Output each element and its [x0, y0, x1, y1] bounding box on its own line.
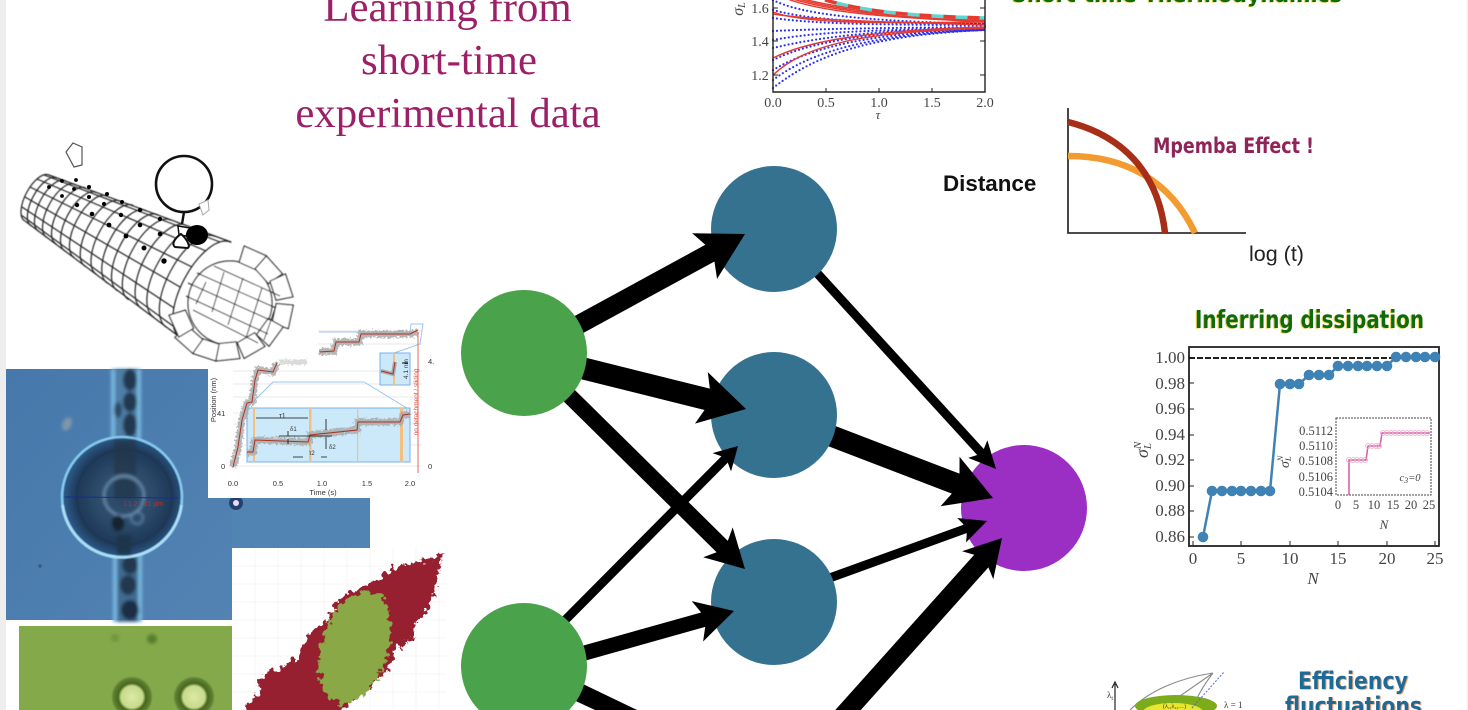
chart tick labels: τ — [876, 107, 882, 122]
inner wall grid — [186, 266, 280, 343]
dissipation tick labels: 0.98 — [1155, 374, 1185, 393]
page edge strip left — [0, 0, 6, 710]
chart tick labels: 2.0 — [976, 96, 994, 111]
dissipation tick labels: 0 — [1189, 549, 1197, 568]
dissipation inset chart: N — [1379, 517, 1390, 532]
gridlines — [233, 331, 422, 466]
dissipation inset chart: =0 — [1408, 473, 1421, 484]
heading: efficiency fluctuations — [1285, 667, 1422, 710]
cone labels: t — [1111, 696, 1113, 702]
dissipation tick labels: 15 — [1330, 549, 1346, 568]
chart tick labels: 0.5 — [817, 96, 835, 111]
axis labels: δ1 — [290, 427, 297, 433]
heading: Mpemba effect: Mpemba Effect ! — [1153, 134, 1314, 158]
arrow: input 1 to hidden 1 — [548, 211, 757, 357]
open end blocks — [188, 261, 272, 345]
Mpemba effect chart — [943, 108, 1304, 266]
dissipation inset chart: 0.5108 — [1299, 454, 1333, 468]
chart tick labels: 1.5 — [923, 96, 941, 111]
cone labels: λ — [1107, 690, 1111, 700]
dissipation inset chart: 20 — [1405, 498, 1417, 512]
chart curves — [773, 0, 985, 88]
x axis label: log (t) — [1249, 242, 1304, 266]
dissipation tick labels: σ — [1132, 449, 1152, 458]
tubulin binding site dots — [47, 178, 167, 264]
heading: efficiency fluctuations: Efficiency — [1298, 667, 1408, 695]
axis labels: 2.0 — [405, 479, 415, 488]
dissipation tick labels: 10 — [1282, 549, 1298, 568]
arrow: input 2 to hidden 2 — [546, 437, 747, 640]
dissipation tick labels: 0.86 — [1155, 527, 1185, 546]
small inset box — [380, 353, 410, 385]
axis labels: 41 — [217, 409, 225, 418]
dissipation inset chart: 5 — [1353, 498, 1359, 512]
microscope image: vesicle on tube — [6, 369, 370, 622]
dissipation inset chart: 0 — [1335, 498, 1341, 512]
input node 2 — [461, 603, 587, 710]
cone labels: (λ₁,λ₂,…) — [1163, 703, 1186, 710]
dissipation tick labels: N — [1306, 569, 1320, 588]
orange curve — [1068, 156, 1195, 233]
axis labels: 4.1 nm — [403, 359, 410, 379]
arrow: hidden 4 to output — [835, 538, 1002, 710]
dissipation tick labels: 0.92 — [1155, 450, 1185, 469]
hidden node 2 — [711, 352, 837, 478]
dissipation inset chart: 0.5104 — [1299, 485, 1334, 499]
axis labels: 0.0 — [228, 479, 238, 488]
axis labels — [209, 357, 434, 497]
arrow: hidden 3 to output — [806, 509, 991, 597]
scatter faint grid — [232, 548, 446, 710]
axis labels: Position (nm) — [209, 377, 218, 422]
dissipation tick labels: 1.00 — [1155, 348, 1185, 367]
cone labels: λ = 1 — [1224, 700, 1242, 710]
axis labels: Time (s) — [309, 488, 337, 497]
chart tick labels: 0.0 — [764, 96, 782, 111]
small grey direction arrow — [199, 200, 209, 215]
main inset box — [247, 408, 410, 462]
zoom connector lines — [247, 324, 423, 410]
red distribution — [240, 550, 444, 710]
kinesin stalk and heads — [173, 212, 208, 248]
input node 1 — [461, 290, 587, 416]
axis labels: 0 — [428, 462, 432, 471]
dissipation inset chart: 3 — [1403, 476, 1408, 485]
hidden node 1 — [711, 166, 837, 292]
axis labels: 1.5 — [362, 479, 372, 488]
axis labels: 1.0 — [317, 479, 327, 488]
axis labels: no detachment / sliding — [413, 368, 420, 435]
arrow: hidden 2 to output — [792, 400, 1002, 523]
dissipation tick labels: 0.96 — [1155, 399, 1185, 418]
dissipation axes frame — [1189, 347, 1439, 546]
axis labels: 4. — [428, 357, 434, 366]
dashed limit line — [1189, 357, 1439, 359]
dissipation tick labels — [1132, 348, 1444, 588]
short-time thermodynamics chart — [730, 0, 994, 122]
dissipation tick labels: 0.94 — [1155, 425, 1186, 444]
y axis label: Distance — [943, 171, 1036, 196]
axis labels: 0 — [221, 462, 225, 471]
chart tick labels: 1.4 — [751, 35, 769, 50]
bright small particle — [229, 496, 243, 510]
chart axes — [773, 0, 985, 92]
chart tick labels: σ — [730, 8, 747, 16]
red curve — [1068, 122, 1165, 233]
kinesin motor cargo — [156, 156, 212, 212]
small direction arrow outline — [66, 143, 82, 167]
position vs time stepping plot — [208, 322, 434, 498]
axis arrow — [1112, 682, 1118, 710]
no detachment vertical trace — [417, 332, 419, 473]
output node — [961, 445, 1087, 571]
dissipation inset chart: 0.5110 — [1299, 439, 1333, 453]
hidden node 3 — [711, 539, 837, 665]
dissipation inset chart: c — [1399, 473, 1404, 484]
arrow: input 2 to hidden 3 — [560, 591, 740, 679]
chart tick labels: 1.6 — [751, 2, 769, 17]
axis labels: τ2 — [309, 451, 315, 457]
level sets — [1135, 695, 1217, 710]
dissipation series — [1198, 352, 1440, 542]
dissipation tick labels: N — [1132, 441, 1144, 450]
orange dwell bars — [253, 408, 403, 462]
dissipation inset chart: 0.5106 — [1299, 470, 1333, 484]
axis labels: δ2 — [329, 445, 336, 451]
dissipation inset chart: 10 — [1368, 498, 1380, 512]
cone labels — [1107, 690, 1242, 710]
dissipation inset chart: N — [1275, 454, 1285, 462]
cone lines — [1130, 673, 1213, 710]
microtubule with kinesin illustration — [14, 143, 293, 361]
chart tick labels: 1.0 — [870, 96, 888, 111]
dark specks — [38, 564, 42, 568]
Mpemba axes — [1068, 108, 1246, 233]
title — [295, 0, 601, 137]
page edge strip right — [1467, 0, 1468, 710]
dissipation tick labels: 0.90 — [1155, 476, 1185, 495]
annotation arrows — [256, 418, 332, 457]
title: short-time — [361, 37, 537, 84]
scatter: red and green trajectories — [232, 548, 446, 710]
dissipation tick labels: 5 — [1237, 549, 1245, 568]
scale bar line — [65, 497, 178, 498]
plot paper — [208, 322, 430, 498]
microscope image: green cells — [19, 626, 232, 710]
vesicle — [62, 437, 182, 557]
dissipation tick labels: 20 — [1378, 549, 1396, 568]
chart tick labels — [730, 2, 994, 122]
arrow: input 1 to hidden 2 — [550, 336, 752, 435]
dissipation tick labels: 25 — [1426, 549, 1444, 568]
noisy traces — [233, 332, 418, 467]
dissipation inset chart: 15 — [1387, 498, 1399, 512]
arrow: input 2 towards off-page hidden node — [552, 673, 637, 710]
chart tick labels: L — [737, 2, 748, 9]
arrow: hidden 1 to output — [798, 253, 1006, 478]
dissipation inset chart — [1275, 418, 1435, 532]
dissipation inset chart: 25 — [1423, 498, 1435, 512]
blue dashed axis — [1192, 672, 1224, 708]
dissipation inset chart: L — [1283, 456, 1293, 462]
dissipation inset chart: σ — [1278, 461, 1293, 468]
title: experimental data — [295, 90, 601, 137]
efficiency cone diagram — [1107, 672, 1242, 710]
chart tick labels: 1.2 — [751, 69, 769, 84]
axis labels: τ1 — [279, 413, 286, 420]
microtubule cylinder — [14, 170, 293, 361]
dissipation tick labels: L — [1142, 443, 1154, 450]
axis labels: 0.5 — [273, 479, 283, 488]
dissipation tick labels: 0.88 — [1155, 501, 1185, 520]
scale bar label: L1 21.31 µm — [124, 501, 163, 508]
dissipation chart — [1132, 347, 1444, 588]
green distribution — [306, 582, 404, 710]
arrow: input 1 to hidden 3 — [530, 357, 760, 584]
dissipation inset chart: 0.5112 — [1299, 424, 1333, 438]
